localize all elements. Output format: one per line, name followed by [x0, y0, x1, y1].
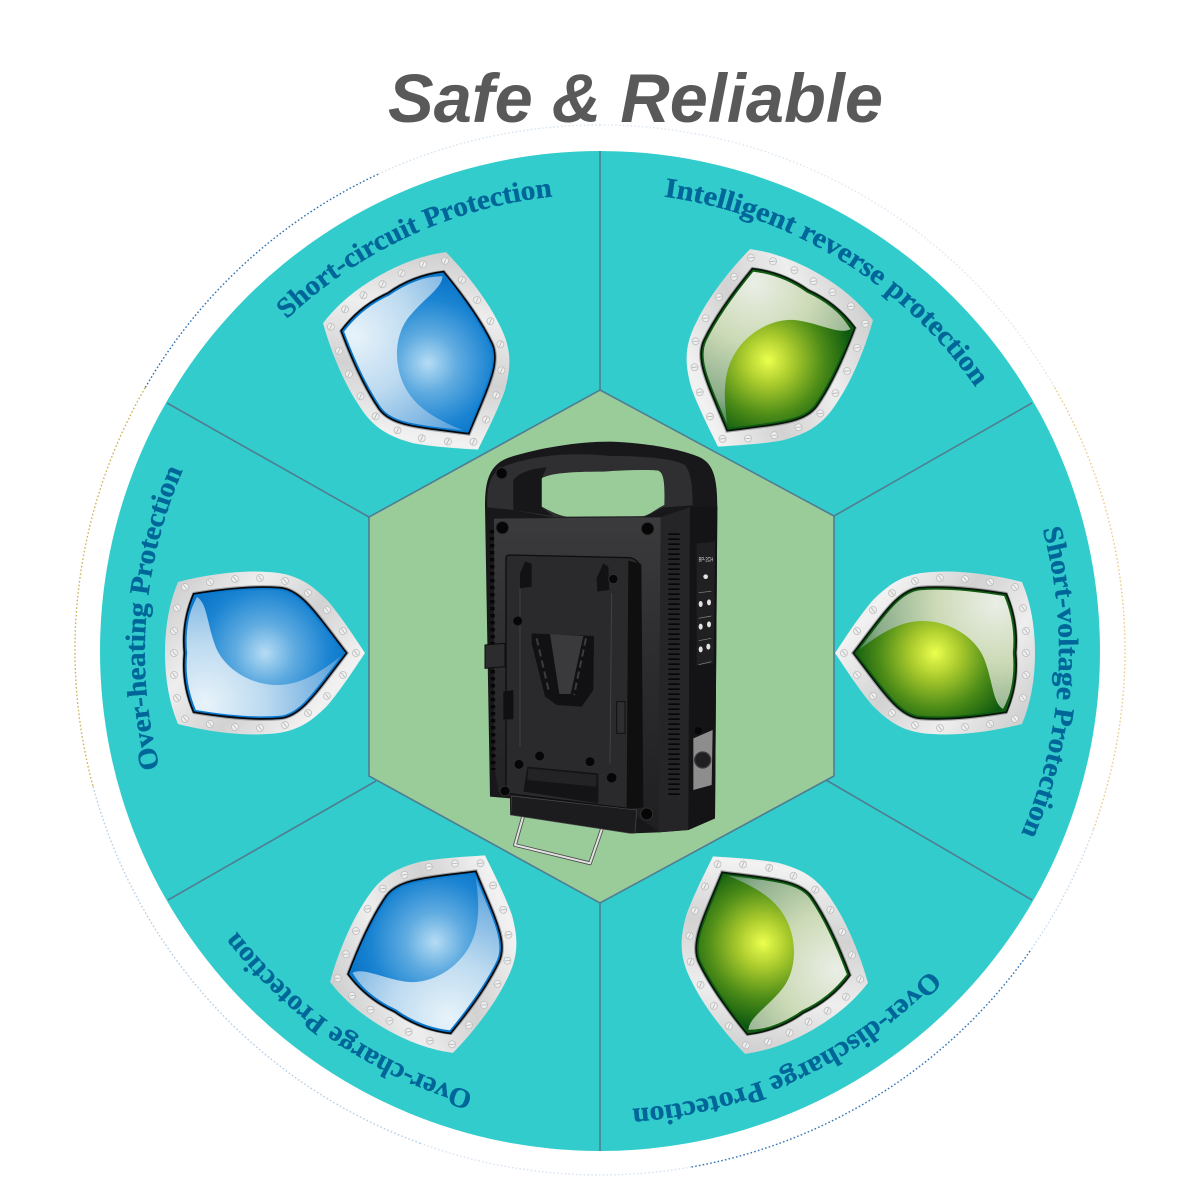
- handle front: [487, 454, 693, 517]
- side tabs: [485, 643, 625, 733]
- far side panel: [688, 507, 717, 830]
- right side strip: [658, 507, 690, 832]
- bottom foot plate: [511, 796, 637, 833]
- label: over-charge protection: Over-charge Protection: [228, 932, 470, 1108]
- label: over-heating protection: Over-heating Protection: [125, 468, 183, 770]
- shield: short-voltage: [835, 572, 1035, 734]
- V-lock centre: [550, 634, 583, 694]
- ventilation slots right: [657, 533, 691, 797]
- label: intelligent reverse protection: Intelligent reverse protection: [664, 178, 984, 387]
- top latches: [520, 562, 609, 592]
- control panel: BP-2CH: [699, 556, 713, 563]
- charger body silhouette: [485, 442, 717, 833]
- title: Safe & Reliable: [388, 60, 883, 137]
- plate detail lines: [520, 588, 612, 763]
- handle opening: [542, 470, 664, 517]
- V-lock mount: [532, 633, 594, 707]
- central green hexagon: [369, 390, 834, 903]
- shield: over-heating: [165, 572, 365, 734]
- XLR power socket: [693, 727, 713, 790]
- shield: intelligent reverse: [647, 233, 889, 487]
- shield: short-circuit: [307, 236, 549, 490]
- dual V-mount battery charger: [485, 442, 717, 863]
- V-lock slots: [537, 638, 586, 695]
- front face: [494, 517, 661, 832]
- battery contact block: [523, 767, 598, 803]
- label: short-voltage protection: Short-voltage Protection: [1021, 526, 1079, 836]
- shield: over-discharge: [642, 816, 884, 1070]
- control panel: [697, 542, 715, 665]
- label: over-discharge protection: Over-discharge Protection: [632, 974, 939, 1124]
- dotted outer ring: [75, 125, 1125, 1175]
- plate side shadow: [627, 561, 643, 808]
- wire stand: [515, 813, 605, 863]
- handle inner shade: [513, 467, 553, 516]
- label: short-circuit protection: Short-circuit Protection: [277, 182, 552, 318]
- teal wheel disc: [100, 151, 1100, 1151]
- shield: over-charge: [314, 815, 556, 1069]
- ventilation slots left: [492, 530, 493, 770]
- segment dividers: [167, 151, 1032, 1151]
- screws: [496, 468, 654, 820]
- mounting plate: [506, 555, 642, 808]
